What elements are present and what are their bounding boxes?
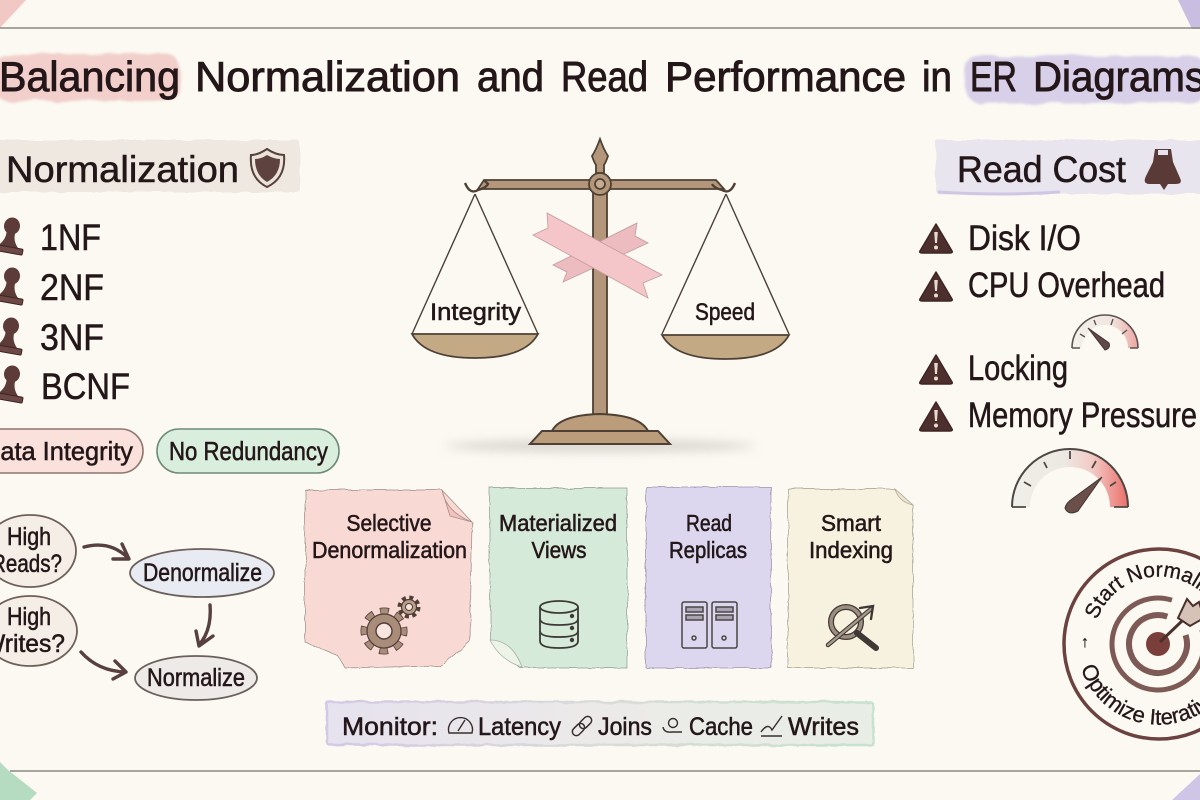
item: locking: Locking (968, 349, 1068, 388)
title with watercolor highlights: Balancing (0, 53, 180, 100)
item: 2NF (0, 265, 104, 308)
icon: large gauge (1012, 449, 1128, 513)
corner tape: top left (0, 0, 26, 28)
item: BCNF: BCNF (41, 366, 130, 407)
card: smart indexing (788, 489, 913, 668)
monitor bar: Writes (788, 713, 859, 741)
scale pole (592, 139, 608, 416)
panel: normalization (0, 140, 339, 473)
title with watercolor highlights: and (477, 53, 544, 100)
card: selective denormalization: Selective (346, 510, 432, 536)
icon: weight (1145, 149, 1181, 190)
icon: writes (761, 716, 782, 736)
node: high reads (0, 515, 76, 587)
heading: normalization: Normalization (6, 149, 239, 190)
card: smart indexing: Indexing (809, 537, 893, 563)
card: materialized views: Views (532, 537, 586, 563)
corner tape: bottom left (0, 762, 37, 800)
crossed ribbon (533, 213, 662, 298)
card: read replicas (646, 487, 771, 668)
monitor bar: Monitor: (342, 713, 438, 741)
right pan with label (662, 194, 789, 359)
scale shadow (445, 440, 755, 452)
icon: link (571, 715, 593, 737)
card: read replicas: Replicas (669, 537, 747, 563)
card: smart indexing: Smart (821, 510, 882, 536)
node: high reads: High (7, 523, 51, 551)
card: materialized views: Materialized (499, 510, 617, 536)
item: cpu overhead: CPU Overhead (968, 266, 1165, 305)
node: high writes: High (7, 603, 51, 631)
icon: cache (663, 718, 682, 732)
node: high writes (0, 596, 77, 666)
arrow in target (1160, 599, 1200, 642)
item: 2NF: 2NF (40, 267, 104, 308)
scale beam (465, 173, 735, 195)
icon: magnifier with arrow (828, 606, 876, 648)
pill: no redundancy: No Redundancy (169, 436, 328, 466)
card: selective denormalization (305, 490, 472, 668)
corner tape: bottom right (1172, 774, 1200, 800)
node: normalize (135, 656, 257, 700)
arrow: reads to denormalize (84, 544, 129, 559)
node: denormalize (130, 549, 274, 597)
icon: database (540, 601, 578, 648)
title with watercolor highlights: Normalization (195, 53, 460, 100)
card: materialized views (490, 488, 627, 668)
list: normal forms (0, 215, 130, 407)
monitor bar (327, 702, 873, 745)
arrow: writes to normalize (81, 652, 126, 679)
heading: normalization (0, 140, 300, 192)
card: selective denormalization: Denormalization (312, 537, 467, 563)
illustration: balance scale (412, 139, 789, 452)
title with watercolor highlights: Performance (665, 53, 906, 100)
item: locking (920, 349, 1068, 388)
scale base (530, 414, 670, 444)
list: cost factors (920, 219, 1197, 513)
icon: shield (251, 149, 284, 187)
card: read replicas: Read (686, 510, 732, 536)
heading: read cost: Read Cost (957, 149, 1127, 190)
left pan with label: Integrity (430, 299, 521, 326)
icon: small gauge (1072, 315, 1138, 350)
item: disk io: Disk I/O (968, 219, 1081, 258)
panel: read cost (304, 138, 1200, 748)
monitor bar: Latency (478, 713, 561, 741)
badge: target start normalized optimize iteratively (1062, 547, 1200, 741)
icon: gears (364, 598, 418, 651)
target rings (1100, 586, 1200, 702)
title with watercolor highlights: ER (970, 53, 1017, 100)
monitor bar: Cache (689, 713, 753, 741)
item: disk io (920, 219, 1081, 258)
title with watercolor highlights: Read (561, 53, 648, 100)
strategy cards (305, 487, 913, 668)
heading: read cost (936, 140, 1200, 194)
circular label arrow: ↑ (1081, 634, 1089, 651)
pill: data integrity (0, 429, 143, 473)
monitor bar: Joins (598, 713, 652, 741)
arrow: denormalize to normalize (196, 605, 213, 646)
icon: latency gauge (449, 718, 472, 733)
title with watercolor highlights (0, 53, 1200, 103)
node: denormalize: Denormalize (143, 559, 262, 587)
left pan with label (412, 194, 538, 358)
item: 3NF: 3NF (40, 317, 104, 358)
corner tape: top right (1178, 0, 1200, 29)
title with watercolor highlights: in (922, 53, 952, 100)
right pan with label: Speed (695, 299, 755, 326)
item: 1NF: 1NF (40, 217, 101, 258)
flowchart: read/write decision (0, 515, 274, 700)
node: normalize: Normalize (147, 664, 245, 692)
pill: no redundancy (157, 429, 339, 473)
item: 3NF (0, 315, 104, 358)
item: BCNF (0, 363, 130, 407)
icon: servers (682, 602, 737, 648)
item: 1NF (0, 215, 101, 258)
